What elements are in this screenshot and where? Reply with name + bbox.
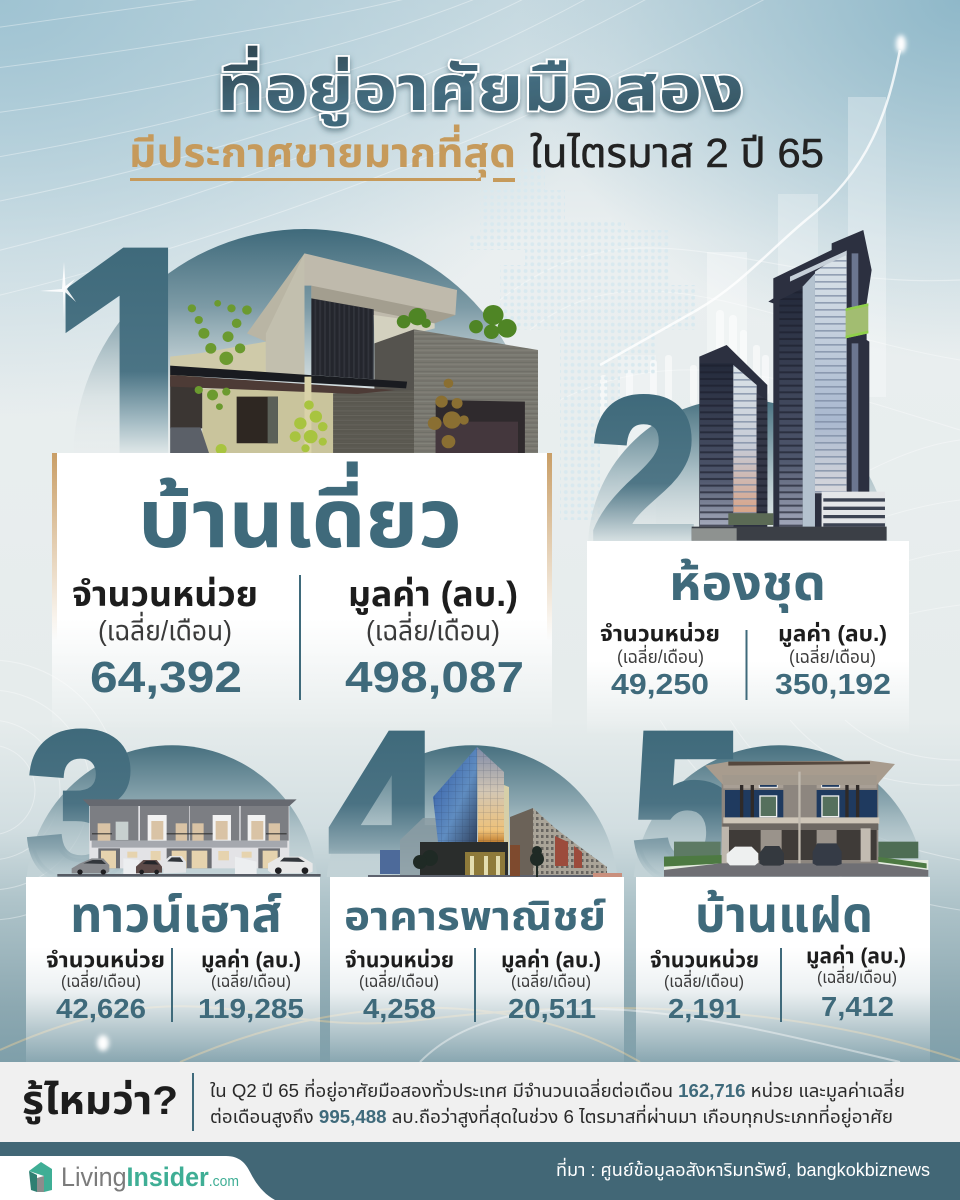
stat: value: 119,285 [198,993,304,1024]
source credit: ที่มา : ศูนย์ข้อมูลอสังหาริมทรัพย์, bangkokbiznews [556,1157,930,1182]
heading: บ้านแฝด [695,887,873,943]
number 3: 3 [26,688,138,925]
stat: value [501,949,601,1024]
stat: units: (เฉลี่ย/เดือน) [61,969,141,991]
callout heading: รู้ไหมว่า? [22,1078,178,1125]
stat: value: (เฉลี่ย/เดือน) [817,965,897,987]
title [129,45,824,182]
card [636,877,930,1062]
number 1: 1 [45,171,227,578]
image: commercial buildings [368,747,622,877]
stat: units [650,949,759,1024]
panel: rank 5 semi-detached house [632,688,930,1062]
callout: did you know [0,1062,960,1142]
card [330,877,624,1062]
stat: value [198,949,304,1024]
stat: units: จำนวนหน่วย [46,949,165,972]
callout text [210,1078,905,1129]
heading: บ้านเดี่ยว [138,461,462,565]
subheading: มีประกาศขายมากที่สุด [129,124,516,178]
world map dots [470,165,695,520]
number 5: 5 [632,688,744,925]
image: townhouse row [57,799,321,877]
number 4: 4 [329,688,441,925]
stat: units [600,621,720,701]
stat: value: 350,192 [775,669,891,701]
stat: value: มูลค่า (ลบ.) [201,949,301,973]
stat: units: จำนวนหน่วย [72,575,258,614]
heading: ทาวน์เฮาส์ [70,887,282,943]
panel: rank 2 condominium [587,230,909,735]
logo wordmark: LivingInsider.com [61,1162,239,1192]
stat: value [345,575,524,702]
stat: units: 4,258 [363,993,436,1024]
image: semi-detached house [664,761,928,877]
image: condominium towers [692,230,887,541]
rank circle 3 [27,745,317,877]
rank circle 2 [588,399,888,541]
logo tab [0,1156,275,1200]
stat: units: จำนวนหน่วย [650,949,759,972]
stat: value: (เฉลี่ย/เดือน) [211,969,291,991]
bottom city lights [0,1006,960,1062]
panel: rank 1 single house [40,171,552,730]
stat: units: (เฉลี่ย/เดือน) [617,644,704,667]
stat: units [46,949,165,1024]
stat: value: (เฉลี่ย/เดือน) [789,644,876,667]
heading: ห้องชุด [669,557,826,613]
footer [0,1142,960,1200]
rank circle 5 [634,745,924,877]
stat: units: (เฉลี่ย/เดือน) [359,969,439,991]
rising arrow line [600,35,906,365]
stat: units: 2,191 [668,993,741,1024]
stat: value: (เฉลี่ย/เดือน) [366,611,500,646]
stat: value [775,621,891,701]
stat: value: มูลค่า (ลบ.) [806,945,906,969]
callout text: ต่อเดือนสูงถึง 995,488 ลบ.ถือว่าสูงที่สุดในช่วง 6 ไตรมาสที่ผ่านมา เกือบทุกประเภทที่อยู่อาศัย [210,1104,893,1129]
card [587,541,909,735]
stat: units [72,575,258,702]
stat: value: (เฉลี่ย/เดือน) [511,969,591,991]
stat: units: 49,250 [611,669,709,701]
stat: units: (เฉลี่ย/เดือน) [98,611,232,646]
stat: value: มูลค่า (ลบ.) [501,949,601,973]
stat: units: (เฉลี่ย/เดือน) [664,969,744,991]
stat: value: 7,412 [821,991,894,1022]
image: single house [170,253,538,455]
stat: value: 20,511 [508,993,596,1024]
card [52,453,552,730]
card [26,877,320,1062]
stat: units: 64,392 [90,653,242,702]
stat: value: 498,087 [345,653,524,702]
callout text: ใน Q2 ปี 65 ที่อยู่อาศัยมือสองทั่วประเทศ มีจำนวนเฉลี่ยต่อเดือน 162,716 หน่วย และมูลค่าเฉลี่ย [210,1078,905,1103]
logo icon [29,1162,52,1192]
heading: อาคารพาณิชย์ [344,895,606,939]
sparkle [40,262,76,320]
stat: units: จำนวนหน่วย [600,621,720,646]
subheading: ในไตรมาส 2 ปี 65 [530,130,824,176]
stat: units: จำนวนหน่วย [345,949,454,972]
stat: value [806,945,906,1022]
rank circle 4 [327,745,617,877]
background chart bars [600,97,886,535]
stat: value: มูลค่า (ลบ.) [778,621,887,647]
stat: units [345,949,454,1024]
panel: rank 4 commercial building [327,688,624,1062]
subheading [129,124,824,182]
number 2: 2 [589,352,699,600]
rank circle 1 [73,229,537,453]
stat: units: 42,626 [56,993,146,1024]
stat: value: มูลค่า (ลบ.) [348,575,518,615]
panel: rank 3 townhouse [26,688,321,1062]
main heading: ที่อยู่อาศัยมือสอง [217,45,744,127]
